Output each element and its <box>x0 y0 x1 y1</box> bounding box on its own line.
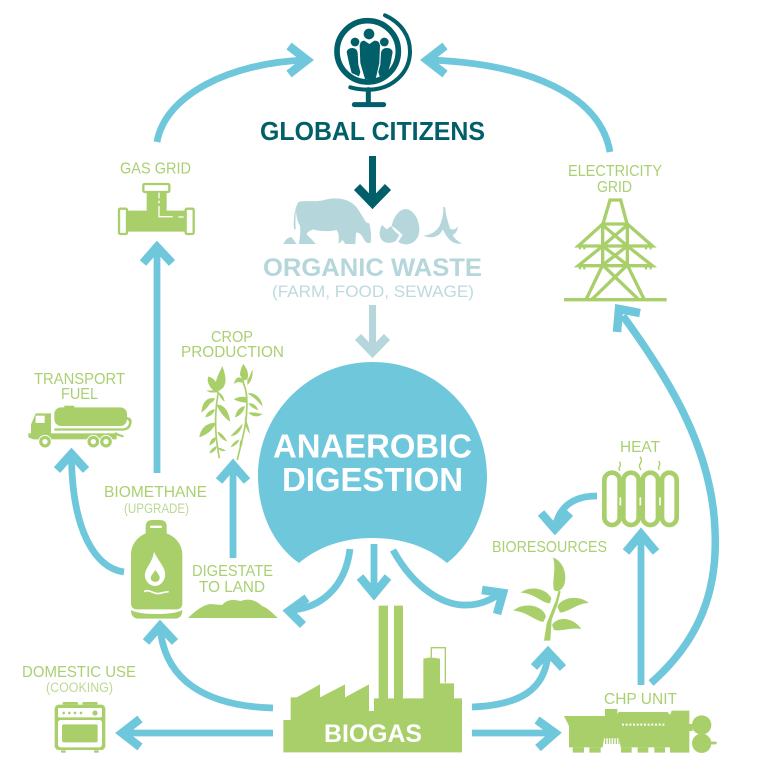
icon: gas bottle <box>131 520 182 619</box>
label: digestate to land: DIGESTATE <box>192 563 273 580</box>
label: digestate to land: TO LAND <box>199 579 265 596</box>
arrow: biogas to biomethane <box>146 626 273 708</box>
arrow: citizens to waste <box>357 156 388 203</box>
label: transport fuel: FUEL <box>61 386 98 403</box>
icon: radiator <box>604 457 677 525</box>
arrow: digestate to crops <box>219 465 247 558</box>
arrow: biomethane to transport <box>57 454 124 572</box>
label: digestate to land <box>192 563 273 596</box>
label: bioresources: BIORESOURCES <box>492 539 607 556</box>
panel: anaerobic digestion <box>258 362 487 563</box>
arrow: digestion to bioresources <box>393 550 503 614</box>
heading: organic waste: ORGANIC WASTE <box>263 254 482 282</box>
label: heat: HEAT <box>620 439 660 456</box>
panel: anaerobic digestion: ANAEROBIC <box>273 428 472 464</box>
arrow: biomethane to gas grid <box>143 247 172 473</box>
label: transport fuel: TRANSPORT <box>34 371 125 388</box>
label: upgrade: (UPGRADE) <box>124 501 189 516</box>
arrow: chp to heat <box>626 534 656 685</box>
arrow: waste to digestion <box>358 305 387 352</box>
icon: crop plants <box>199 364 263 460</box>
label: crop production <box>181 329 284 361</box>
label: cooking: (COOKING) <box>46 680 113 695</box>
panel: biogas factory <box>283 606 462 752</box>
panel: anaerobic digestion: DIGESTION <box>282 461 463 498</box>
icon: plant <box>513 557 589 641</box>
icon: chp engine <box>564 709 717 753</box>
icon: globe with citizens <box>337 15 410 105</box>
arrow: biogas to chp <box>472 720 555 748</box>
arrow: chp to electricity <box>617 309 715 683</box>
label: electricity grid: ELECTRICITY <box>568 163 662 180</box>
arrow: digestion to biogas <box>360 544 388 594</box>
icon: cooker <box>55 702 105 753</box>
label: gas grid: GAS GRID <box>120 160 191 178</box>
arrow: digestion to digestate <box>289 549 350 625</box>
icon: gas pipe <box>119 184 194 234</box>
icon: tanker truck <box>28 406 132 448</box>
arrow: citizens feedback from gas grid <box>157 46 307 142</box>
icon: pylon <box>564 200 667 300</box>
label: electricity grid: GRID <box>597 179 632 196</box>
icon: organic waste <box>283 198 462 244</box>
label: transport fuel <box>34 371 125 403</box>
label: domestic use: DOMESTIC USE <box>22 664 136 681</box>
label: electricity grid <box>568 163 662 196</box>
label: biomethane: BIOMETHANE <box>104 484 207 501</box>
heading: global citizens: GLOBAL CITIZENS <box>260 118 485 146</box>
panel: biogas factory: BIOGAS <box>324 720 422 748</box>
arrow: biogas to bioresources <box>472 652 563 707</box>
arrow: biogas to domestic use <box>122 719 273 747</box>
label: crop production: CROP <box>211 329 253 346</box>
label: chp unit: CHP UNIT <box>604 691 677 708</box>
arrow: heat to bioresources <box>541 496 597 529</box>
text: waste sources: (FARM, FOOD, SEWAGE) <box>272 282 474 301</box>
label: crop production: PRODUCTION <box>181 344 284 361</box>
arrow: citizens feedback from electricity <box>427 46 610 152</box>
icon: soil mound <box>188 600 278 618</box>
